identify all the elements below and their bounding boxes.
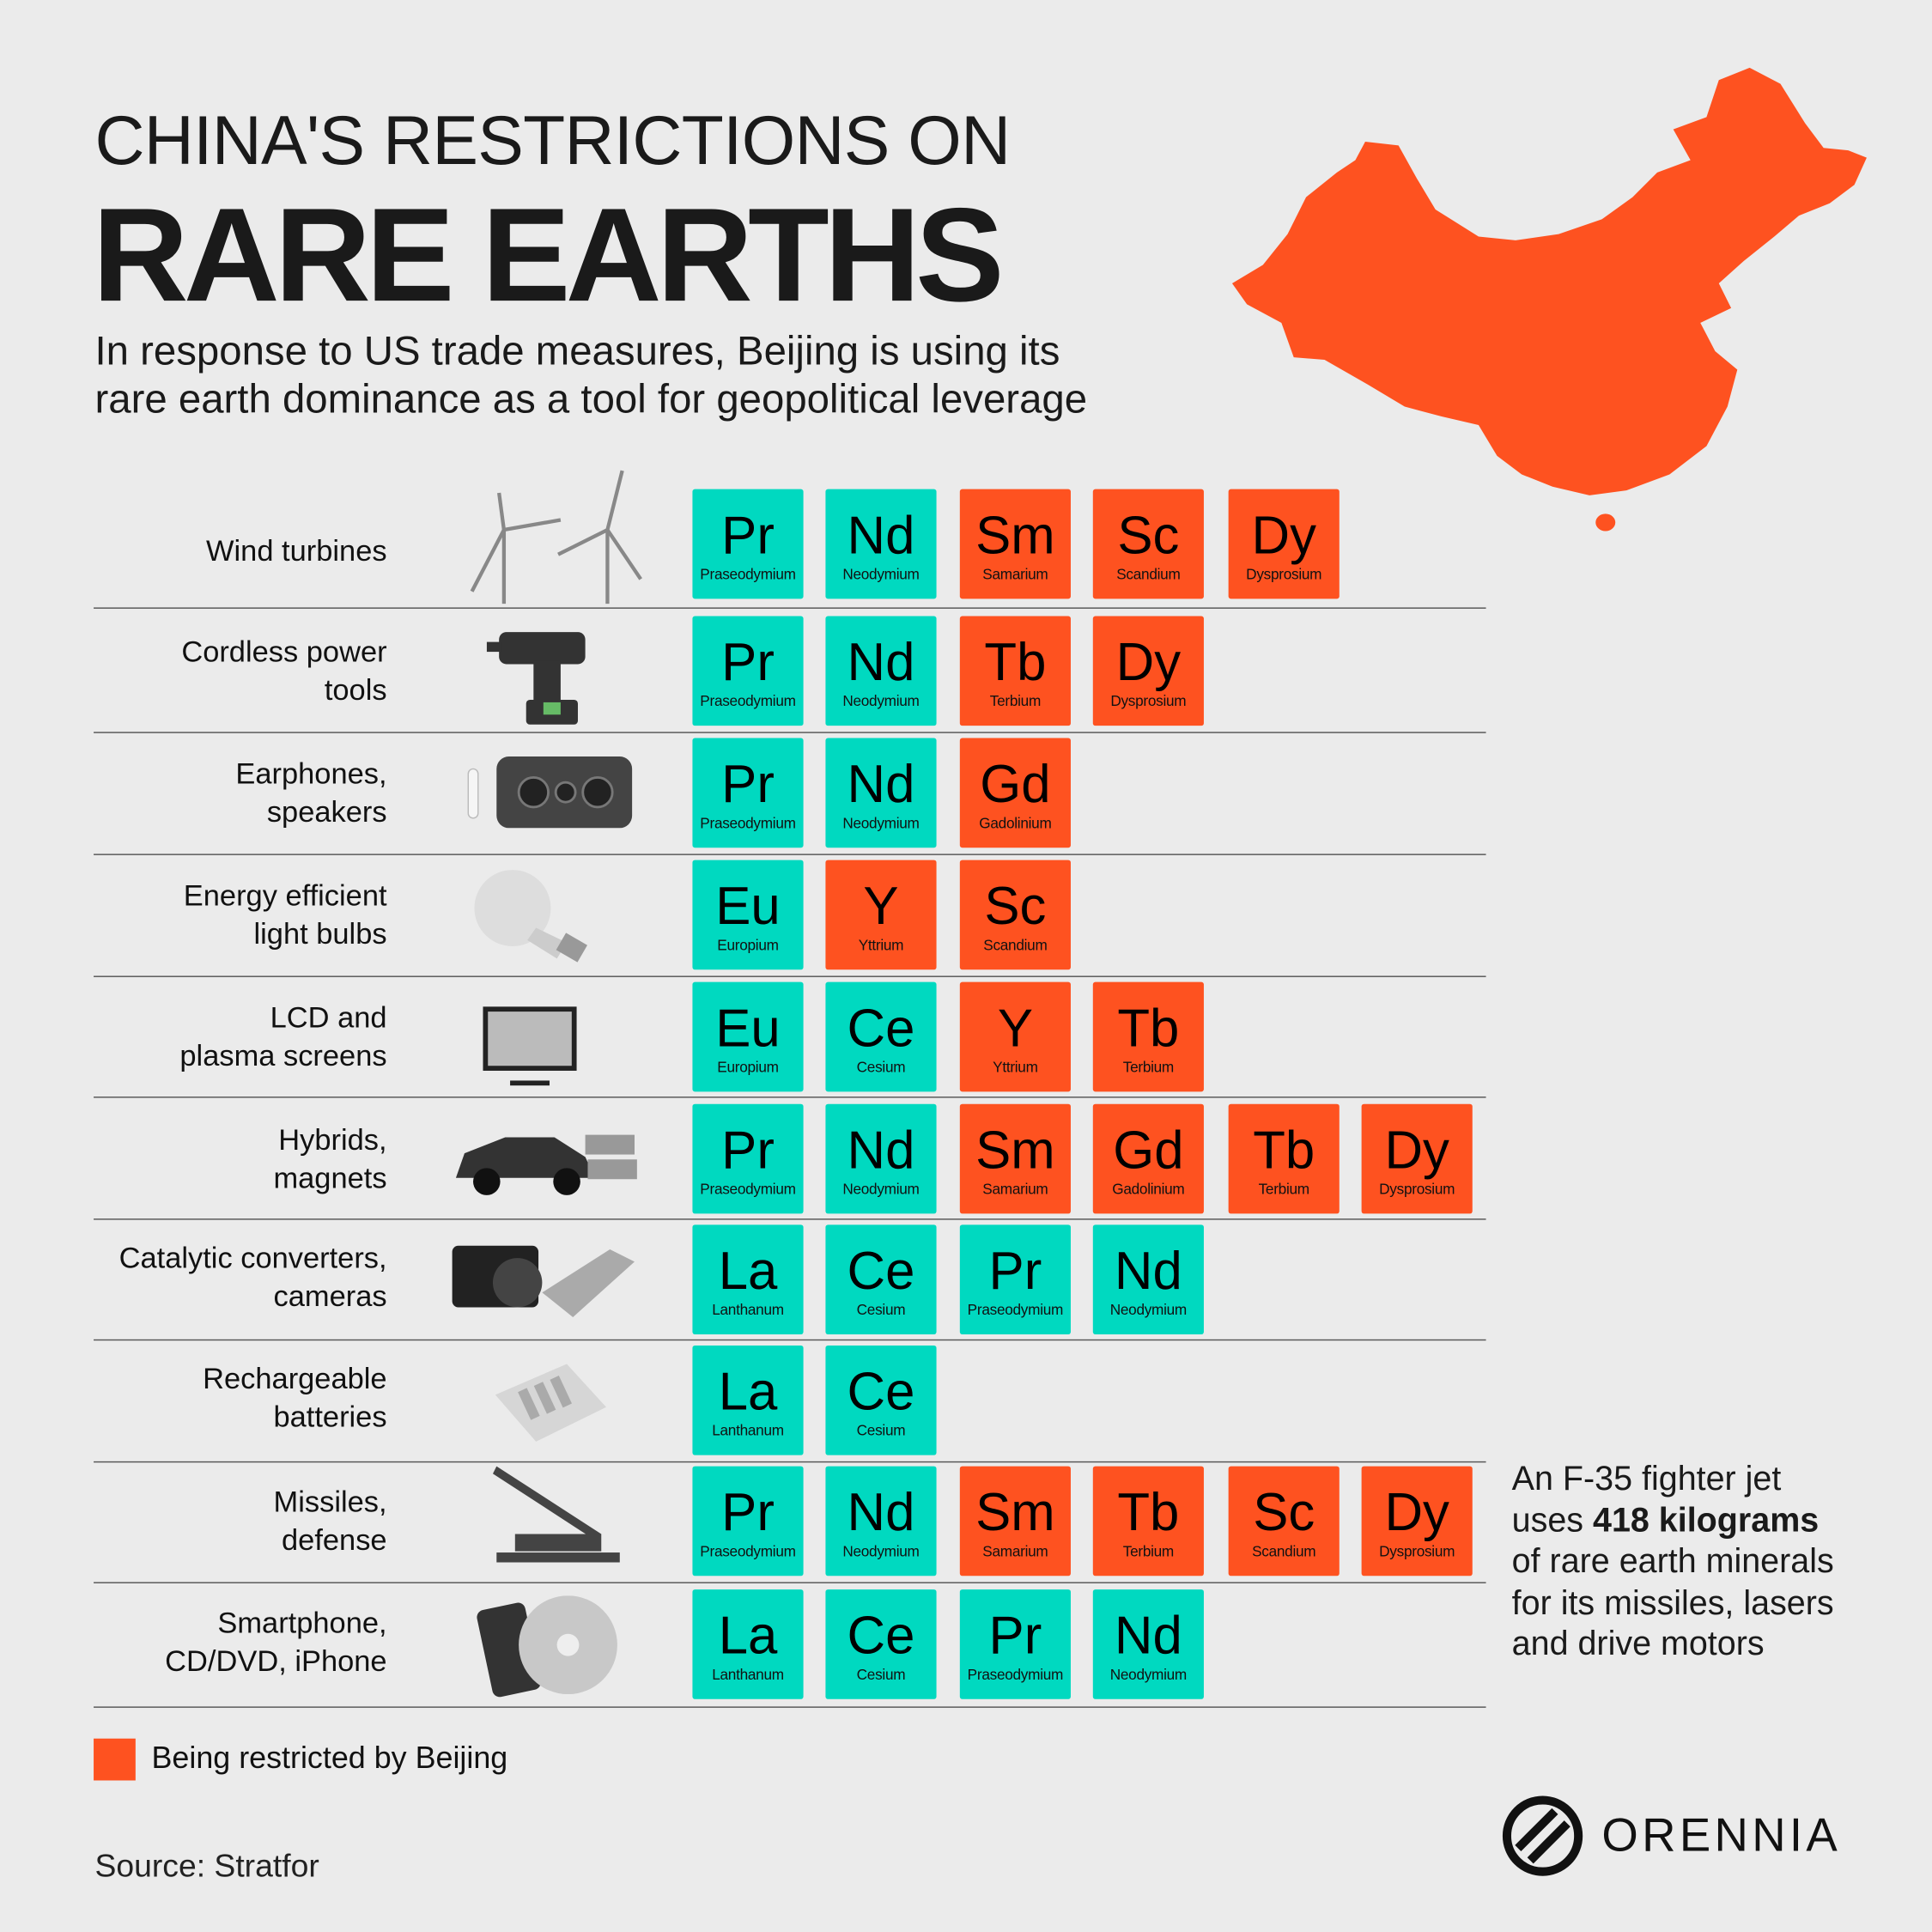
- label: [274, 1486, 387, 1558]
- row: wind turbines: Sm: [975, 507, 1055, 566]
- row: light bulbs: Yttrium: [859, 937, 903, 954]
- label: speakers: [267, 796, 387, 829]
- row: hybrids, magnets: Samarium: [982, 1181, 1048, 1198]
- row: hybrids, magnets: Tb: [1253, 1121, 1315, 1181]
- row: missiles, defense: Samarium: [982, 1543, 1048, 1560]
- row: smartphone: La: [719, 1607, 777, 1666]
- label: [119, 1242, 387, 1314]
- subtitle: [94, 328, 1087, 422]
- label: LCD and: [270, 1002, 387, 1035]
- label: Smartphone,: [217, 1607, 387, 1640]
- label: magnets: [273, 1162, 387, 1195]
- callout: F-35: and drive motors: [1512, 1624, 1765, 1662]
- icon: camera & converter: [452, 1245, 635, 1317]
- row: hybrids, magnets: [273, 1104, 1473, 1214]
- row: batteries: La: [719, 1363, 777, 1422]
- row: batteries: Lanthanum: [712, 1422, 784, 1439]
- row: wind turbines: Neodymium: [842, 566, 920, 583]
- row: smartphone: Pr: [989, 1607, 1042, 1666]
- row: cordless power tools: Dysprosium: [1110, 692, 1186, 710]
- row: earphones, speakers: Neodymium: [842, 815, 920, 832]
- row: light bulbs: Europium: [717, 937, 779, 954]
- callout: F-35: [1511, 1459, 1834, 1662]
- row: wind turbines: Dy: [1252, 507, 1316, 566]
- row: smartphone: Praseodymium: [968, 1666, 1063, 1683]
- row: LCD screens: Tb: [1117, 999, 1179, 1059]
- icon: car: [456, 1135, 637, 1195]
- row: catalytic converters: Lanthanum: [712, 1301, 784, 1318]
- row: hybrids, magnets: Terbium: [1259, 1181, 1309, 1198]
- row: earphones, speakers: Gd: [980, 756, 1051, 815]
- icon: phone & disc: [477, 1595, 617, 1697]
- row: batteries: Cesium: [857, 1422, 905, 1439]
- row: LCD screens: [179, 982, 1204, 1092]
- row: missiles, defense: Pr: [721, 1484, 775, 1543]
- row: wind turbines: Samarium: [982, 566, 1048, 583]
- subtitle: In response to US trade measures, Beijing is using its: [94, 328, 1060, 374]
- label: Cordless power: [181, 635, 387, 669]
- label: [181, 635, 387, 708]
- row: missiles, defense: [274, 1467, 1473, 1577]
- row: missiles, defense: Terbium: [1123, 1543, 1174, 1560]
- row: catalytic converters: Cesium: [857, 1301, 905, 1318]
- row: hybrids, magnets: Gd: [1113, 1121, 1184, 1181]
- icon: tv: [483, 1006, 577, 1085]
- row: catalytic converters: La: [719, 1242, 777, 1301]
- row: wind turbines: [206, 471, 1340, 605]
- row: smartphone: Ce: [848, 1607, 914, 1666]
- row: light bulbs: Eu: [715, 878, 781, 937]
- label: light bulbs: [253, 918, 387, 951]
- row: missiles, defense: Sc: [1253, 1484, 1315, 1543]
- row: hybrids, magnets: Neodymium: [842, 1181, 920, 1198]
- row: catalytic converters: Ce: [848, 1242, 914, 1301]
- subtitle: rare earth dominance as a tool for geopolitical leverage: [94, 376, 1087, 422]
- row: earphones, speakers: Pr: [721, 756, 775, 815]
- label: Missiles,: [274, 1486, 387, 1519]
- label: Hybrids,: [278, 1124, 387, 1157]
- label: [235, 757, 387, 829]
- row: catalytic converters: Pr: [989, 1242, 1042, 1301]
- row: cordless power tools: Pr: [721, 634, 775, 692]
- row: smartphone: Cesium: [857, 1666, 905, 1683]
- row: cordless power tools: Tb: [984, 634, 1046, 692]
- row: hybrids, magnets: Dysprosium: [1379, 1181, 1455, 1198]
- icon: missile launcher: [493, 1467, 620, 1563]
- callout: F-35: for its missiles, lasers: [1512, 1583, 1834, 1621]
- row: smartphone: Neodymium: [1110, 1666, 1187, 1683]
- callout: F-35: uses 418 kilograms: [1512, 1500, 1819, 1539]
- row: batteries: Ce: [848, 1363, 914, 1422]
- source: Source: Stratfor: [94, 1847, 319, 1884]
- row: hybrids, magnets: Praseodymium: [700, 1181, 796, 1198]
- logo: ORENNIA: [1601, 1810, 1841, 1862]
- row: catalytic converters: [119, 1224, 1204, 1334]
- row: wind turbines: Pr: [721, 507, 775, 566]
- separators: [94, 607, 1486, 609]
- row: cordless power tools: Neodymium: [842, 692, 920, 710]
- label: Rechargeable: [203, 1363, 387, 1396]
- label: [184, 880, 387, 951]
- row: wind turbines: Nd: [848, 507, 914, 566]
- legend: Being restricted by Beijing: [151, 1741, 507, 1776]
- label: cameras: [274, 1280, 387, 1314]
- row: LCD screens: Ce: [848, 999, 914, 1059]
- icon: battery charger: [495, 1364, 606, 1442]
- row: LCD screens: Eu: [715, 999, 781, 1059]
- row: batteries: [203, 1346, 937, 1455]
- row: catalytic converters: Nd: [1115, 1242, 1182, 1301]
- row: wind turbines: Sc: [1117, 507, 1179, 566]
- row: missiles, defense: Dysprosium: [1379, 1543, 1455, 1560]
- row: missiles, defense: Tb: [1117, 1484, 1179, 1543]
- row: missiles, defense: Nd: [848, 1484, 914, 1543]
- row: missiles, defense: Dy: [1384, 1484, 1449, 1543]
- row: smartphone: [165, 1589, 1204, 1699]
- icon: drill: [486, 632, 586, 725]
- callout: F-35: An F-35 fighter jet: [1512, 1459, 1781, 1497]
- row: LCD screens: Y: [998, 999, 1033, 1059]
- row: missiles, defense: Praseodymium: [700, 1543, 796, 1560]
- row: wind turbines: Dysprosium: [1246, 566, 1321, 583]
- row: light bulbs: Sc: [984, 878, 1046, 937]
- row: earphones, speakers: Praseodymium: [700, 815, 796, 832]
- label: CD/DVD, iPhone: [165, 1645, 387, 1678]
- map: China: [1232, 67, 1867, 531]
- label: [273, 1124, 387, 1195]
- row: light bulbs: Scandium: [983, 937, 1048, 954]
- row: hybrids, magnets: Sm: [975, 1121, 1055, 1181]
- row: earphones, speakers: [235, 738, 1071, 848]
- label: plasma screens: [179, 1040, 387, 1073]
- label: Catalytic converters,: [119, 1242, 387, 1275]
- row: wind turbines: Scandium: [1116, 566, 1181, 583]
- label: Earphones,: [235, 757, 387, 791]
- icon: speaker: [467, 756, 632, 828]
- label: tools: [325, 674, 387, 708]
- row: missiles, defense: Neodymium: [842, 1543, 920, 1560]
- row: light bulbs: Y: [863, 878, 899, 937]
- row: catalytic converters: Neodymium: [1110, 1301, 1187, 1318]
- row: hybrids, magnets: Nd: [848, 1121, 914, 1181]
- title line 2: RARE EARTHS: [93, 180, 999, 329]
- row: LCD screens: Terbium: [1123, 1059, 1174, 1076]
- label: defense: [282, 1524, 387, 1558]
- row: LCD screens: Cesium: [857, 1059, 905, 1076]
- row: smartphone: Nd: [1115, 1607, 1182, 1666]
- row: cordless power tools: Dy: [1116, 634, 1181, 692]
- row: light bulbs: [184, 860, 1071, 970]
- label: Wind turbines: [206, 535, 387, 568]
- row: earphones, speakers: Gadolinium: [979, 815, 1052, 832]
- icon: wind turbines: [471, 471, 642, 605]
- title line 1: CHINA'S RESTRICTIONS ON: [94, 101, 1010, 179]
- label: [203, 1363, 387, 1434]
- row: hybrids, magnets: Pr: [721, 1121, 775, 1181]
- row: cordless power tools: Praseodymium: [700, 692, 796, 710]
- label: [165, 1607, 387, 1678]
- row: cordless power tools: Terbium: [990, 692, 1041, 710]
- icon: bulb: [474, 870, 587, 962]
- row: wind turbines: Praseodymium: [700, 566, 796, 583]
- row: earphones, speakers: Nd: [848, 756, 914, 815]
- row: missiles, defense: Scandium: [1252, 1543, 1315, 1560]
- row: hybrids, magnets: Dy: [1384, 1121, 1449, 1181]
- row: LCD screens: Yttrium: [993, 1059, 1038, 1076]
- row: cordless power tools: Nd: [848, 634, 914, 692]
- row: smartphone: Lanthanum: [712, 1666, 784, 1683]
- row: hybrids, magnets: Gadolinium: [1112, 1181, 1184, 1198]
- label: batteries: [273, 1401, 387, 1434]
- row: catalytic converters: Praseodymium: [968, 1301, 1063, 1318]
- row: missiles, defense: Sm: [975, 1484, 1055, 1543]
- row: cordless power tools: [181, 617, 1204, 726]
- label: Energy efficient: [184, 880, 387, 913]
- row: LCD screens: Europium: [717, 1059, 779, 1076]
- callout: F-35: of rare earth minerals: [1512, 1541, 1834, 1580]
- logo: [1503, 1796, 1841, 1876]
- label: [179, 1002, 387, 1073]
